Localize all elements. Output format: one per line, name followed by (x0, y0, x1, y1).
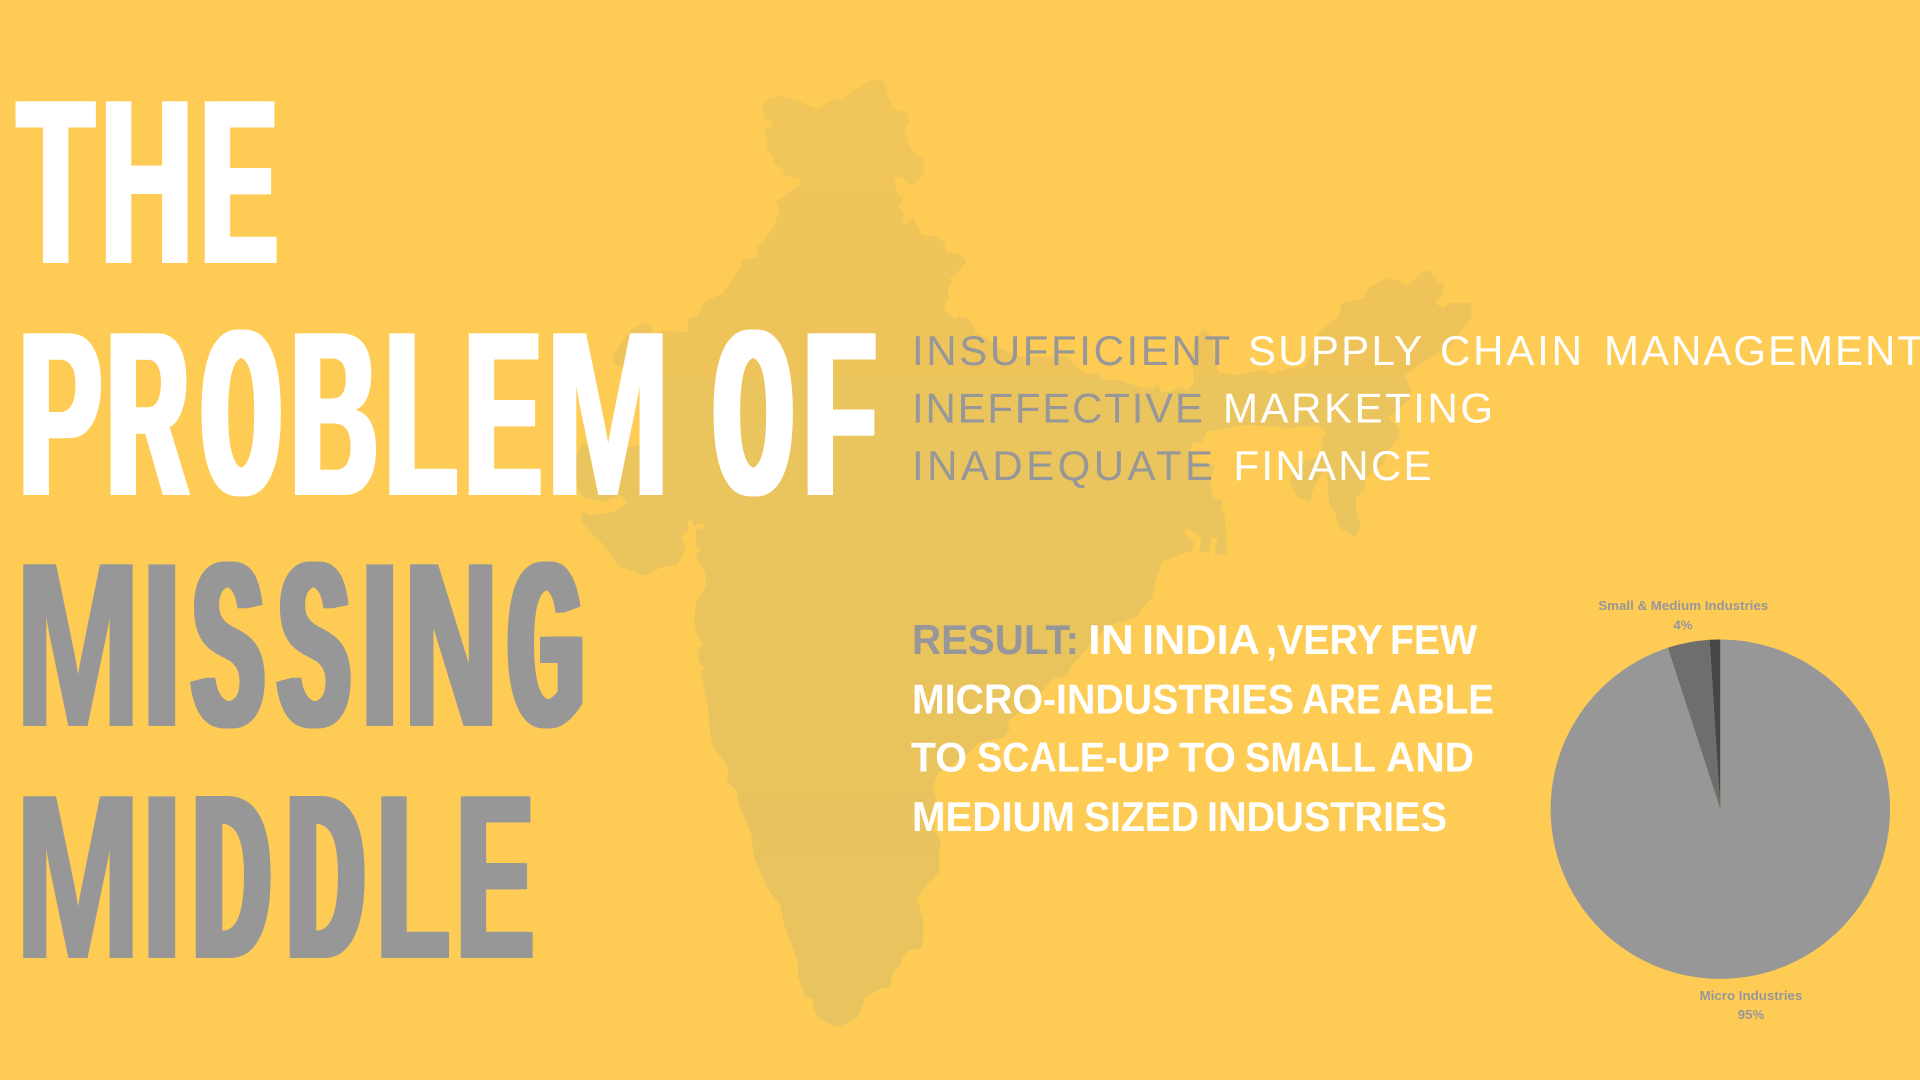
result statement: TO (1179, 734, 1236, 781)
problem: ineffective marketing: MARKETING (1223, 384, 1493, 431)
title line: PROBLEM OF: O (712, 289, 794, 568)
title line: THE: H (101, 50, 193, 313)
list of three problems (912, 327, 1920, 489)
title line: MIDDLE: L (378, 745, 448, 1008)
title line: MISSING: M (15, 513, 141, 776)
slice: small and medium industries 4% (1668, 640, 1720, 809)
title line: MISSING: G (506, 521, 585, 800)
title line: MIDDLE: D (190, 753, 272, 1032)
title line: THE (16, 50, 277, 313)
title line: PROBLEM OF: L (386, 282, 456, 545)
title line: MIDDLE: D (284, 753, 367, 1032)
result statement: ,VERY (1266, 616, 1383, 663)
title: The Problem of Missing Middle (15, 50, 876, 1032)
result statement: AND (1386, 734, 1474, 781)
problem: inadequate finance: FINANCE (1234, 442, 1432, 489)
title line: MISSING (15, 513, 585, 800)
title line: PROBLEM OF: E (466, 282, 540, 545)
label: small and medium industries (1598, 598, 1768, 632)
title line: MIDDLE (15, 745, 533, 1032)
label: micro industries (1700, 988, 1802, 1022)
label: micro industries: 95% (1738, 1007, 1764, 1022)
result statement: INDUSTRIES (1207, 793, 1447, 840)
pie chart: industry share (1551, 598, 1890, 1022)
result statement: SCALE-UP (977, 734, 1170, 781)
problem: insufficient supply chain management: INSUFFICIENT (912, 327, 1230, 374)
label: small and medium industries: 4% (1673, 617, 1693, 632)
slice: remaining 1% (1710, 639, 1720, 809)
title line: MIDDLE: E (458, 745, 532, 1008)
result statement: SIZED (1084, 793, 1199, 840)
label: small and medium industries: Small & Medium Industries (1598, 598, 1768, 613)
title line: PROBLEM OF: P (19, 282, 101, 545)
result statement: TO (911, 734, 967, 781)
problem: inadequate finance (912, 442, 1432, 489)
result statement: ABLE (1389, 675, 1494, 722)
result statement: MICRO-INDUSTRIES (912, 675, 1294, 722)
title line: PROBLEM OF: B (291, 282, 378, 545)
result statement: MEDIUM (912, 793, 1075, 840)
problem: insufficient supply chain management: CHAIN (1440, 327, 1582, 374)
slice: micro industries 95% (1551, 640, 1890, 979)
title line: THE: E (202, 50, 276, 313)
title line: THE: T (18, 50, 94, 313)
title line: MISSING: I (136, 513, 188, 776)
title line: PROBLEM OF: M (545, 282, 671, 545)
result statement: FEW (1390, 616, 1477, 663)
result statement: RESULT: (912, 616, 1079, 663)
problem: inadequate finance: INADEQUATE (912, 442, 1213, 489)
problem: insufficient supply chain management: MANAGEMENT (1604, 327, 1920, 374)
title line: MISSING: S (278, 521, 351, 800)
title line: MISSING: N (405, 513, 497, 776)
title line: MIDDLE: I (136, 745, 188, 1008)
result statement: IN (1088, 616, 1134, 663)
title line: PROBLEM OF (19, 282, 876, 568)
title line: MISSING: I (354, 513, 406, 776)
result statement: SMALL (1245, 734, 1376, 781)
title line: PROBLEM OF: O (200, 289, 282, 568)
title line: PROBLEM OF: R (108, 282, 188, 545)
problem: insufficient supply chain management: SUPPLY (1248, 327, 1422, 374)
label: micro industries: Micro Industries (1700, 988, 1802, 1003)
result statement: ARE (1302, 675, 1381, 722)
title line: PROBLEM OF: F (804, 282, 875, 545)
title line: MIDDLE: M (15, 745, 141, 1008)
title line: MISSING: S (192, 521, 264, 800)
problem: insufficient supply chain management (912, 327, 1920, 374)
result statement: INDIA (1142, 616, 1260, 663)
problem: ineffective marketing (912, 384, 1493, 431)
result statement (911, 616, 1494, 840)
problem: ineffective marketing: INEFFECTIVE (912, 384, 1203, 431)
